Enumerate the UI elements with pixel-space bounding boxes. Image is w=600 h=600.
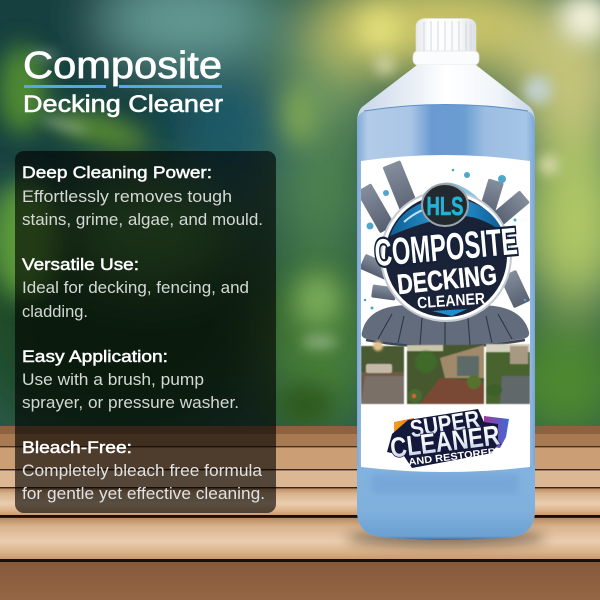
title underline <box>24 85 222 88</box>
label art: composite planks <box>356 160 530 308</box>
label text: DECKING: DECKING <box>396 259 498 300</box>
feature: easy application <box>22 347 239 412</box>
logo: Super Cleaner and Restorer: AND RESTORER <box>408 447 497 468</box>
label photo: patio right <box>486 344 530 404</box>
feature: easy application: Use with a brush, pump <box>22 370 204 389</box>
feature: deep cleaning power: Effortlessly removes tough <box>22 187 232 206</box>
feature: deep cleaning power: stains, grime, algae, and mould. <box>22 210 263 229</box>
wooden deck <box>0 426 600 600</box>
feature: easy application: Easy Application: <box>22 347 168 366</box>
feature: easy application: sprayer, or pressure washer. <box>22 393 239 412</box>
label text: CLEANER: CLEANER <box>417 291 486 312</box>
translucent feature panel <box>15 151 276 513</box>
logo: Super Cleaner and Restorer: CLEANER <box>388 419 501 464</box>
feature: versatile use: cladding. <box>22 302 88 321</box>
feature: versatile use: Ideal for decking, fencing, and <box>22 278 249 297</box>
bottle shadow <box>346 530 546 546</box>
lower liquid <box>357 465 535 540</box>
label art: deck fan <box>362 305 529 347</box>
logo: Super Cleaner and Restorer <box>387 406 509 468</box>
feature: bleach-free <box>22 438 265 503</box>
product bottle <box>356 18 535 540</box>
label photo: patio centre <box>407 345 484 404</box>
feature: deep cleaning power <box>22 163 263 229</box>
feature: bleach-free: for gentle yet effective cleaning. <box>22 484 265 503</box>
label text: COMPOSITE: COMPOSITE <box>373 221 519 275</box>
feature: deep cleaning power: Deep Cleaning Power: <box>22 163 212 182</box>
product label <box>356 148 530 478</box>
feature: bleach-free: Bleach-Free: <box>22 438 132 457</box>
title: Composite <box>23 45 222 87</box>
subtitle: Decking Cleaner <box>23 91 223 118</box>
background: blurred garden foliage <box>0 0 600 440</box>
bottle cap <box>413 18 479 65</box>
label art: round badge <box>380 190 512 322</box>
bottle shoulder <box>357 65 535 124</box>
label photo: patio left <box>361 341 404 404</box>
feature: versatile use: Versatile Use: <box>22 255 139 274</box>
label art: water splash <box>364 169 526 321</box>
feature: versatile use <box>22 255 249 321</box>
label text: HLS <box>422 184 468 226</box>
logo: Super Cleaner and Restorer: SUPER <box>408 406 482 443</box>
label text: HLS: HLS <box>426 191 464 221</box>
feature: bleach-free: Completely bleach free formula <box>22 461 263 480</box>
bottle liquid body <box>357 104 535 540</box>
